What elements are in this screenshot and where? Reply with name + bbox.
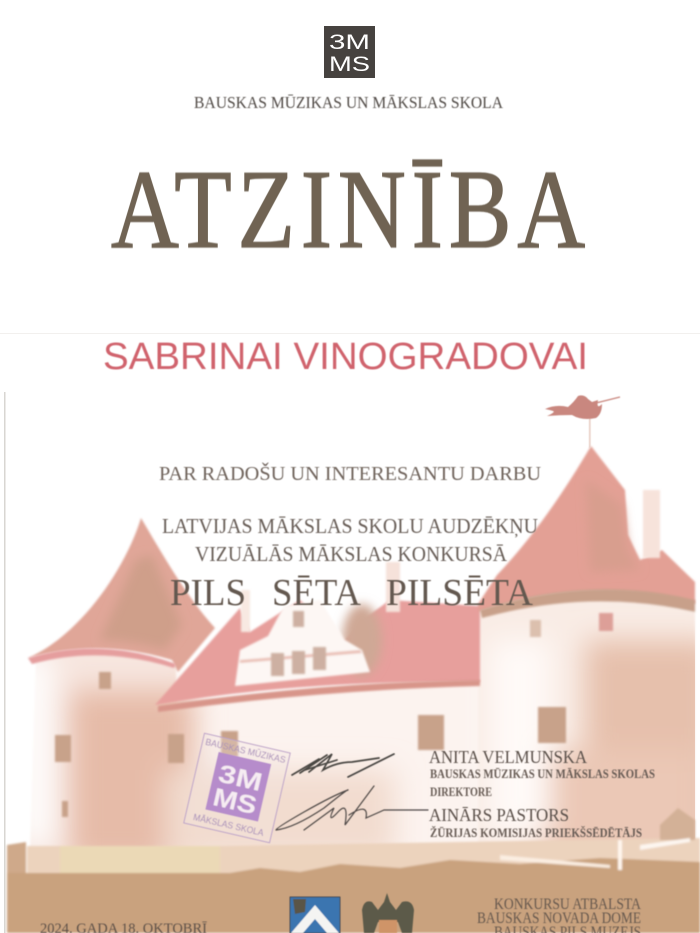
- logo letters: 3M: [329, 31, 370, 54]
- castle windows: [55, 611, 613, 817]
- contest name: SĒTA: [272, 572, 362, 614]
- castle base and ground: [7, 808, 700, 933]
- stamp letters: 3M: [216, 760, 265, 797]
- castle photograph background: [7, 446, 700, 933]
- citation: PAR RADOŠU UN INTERESANTU DARBU: [159, 461, 541, 485]
- school stamp: [184, 733, 290, 843]
- role: ŽŪRIJAS KOMISIJAS PRIEKŠSĒDĒTĀJS: [430, 825, 642, 840]
- recipient name: SABRINAI VINOGRADOVAI: [103, 336, 588, 378]
- signature one: [292, 754, 394, 777]
- logo: MS: [329, 53, 370, 76]
- school stamp: MĀKSLAS SKOLA: [192, 812, 265, 838]
- signatory one: [429, 747, 655, 799]
- school stamp: BAUSKAS MŪZIKAS: [204, 737, 287, 765]
- role: BAUSKAS MŪZIKAS UN MĀKSLAS SKOLAS: [430, 766, 655, 781]
- signatory one: ANITA VELMUNSKA: [429, 747, 587, 767]
- signatory two: [429, 805, 642, 840]
- contest line one: LATVIJAS MĀKSLAS SKOLU AUDZĒKŅU: [162, 514, 538, 538]
- contest line two: VIZUĀLĀS MĀKSLAS KONKURSĀ: [195, 542, 508, 566]
- signature two: [276, 786, 428, 830]
- logo: [324, 26, 375, 78]
- contest name: PILSĒTA: [386, 572, 534, 614]
- school name: BAUSKAS MŪZIKAS UN MĀKSLAS SKOLA: [194, 93, 503, 112]
- roof eaves and gable: [28, 490, 695, 712]
- contest name: PILS: [170, 572, 246, 614]
- school stamp: MS: [210, 783, 259, 820]
- castle walls: [30, 598, 695, 860]
- sponsors: BAUSKAS NOVADA DOME: [477, 910, 641, 927]
- roof shading: [100, 480, 640, 676]
- icon: crest with supporters: [362, 893, 414, 933]
- title: ATZINĪBA: [111, 148, 591, 272]
- weathered wall patches: [20, 640, 700, 870]
- sponsors: [477, 896, 641, 933]
- icon: blue coat of arms: [290, 897, 340, 933]
- sponsors: KONKURSU ATBALSTA: [494, 896, 641, 913]
- signatory one: DIREKTORE: [430, 784, 492, 799]
- weather vane: [545, 395, 620, 448]
- signatory two: AINĀRS PASTORS: [429, 805, 569, 825]
- contest name: [170, 572, 534, 614]
- castle roofs: [28, 446, 695, 705]
